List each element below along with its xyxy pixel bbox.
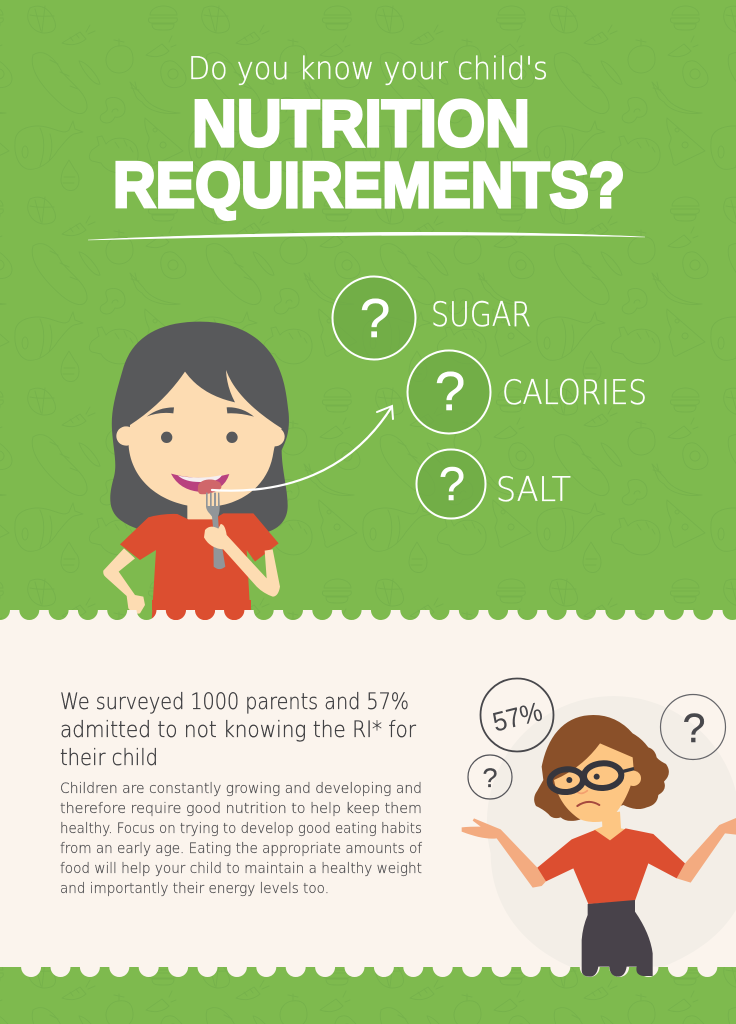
skirt (582, 900, 653, 977)
question circle: salt: ? (439, 457, 465, 510)
hair (534, 715, 669, 821)
title underline (88, 232, 645, 240)
fork (206, 493, 225, 569)
left arm (103, 548, 145, 614)
bubble: 57%: 57% (490, 696, 545, 738)
title: REQUIREMENTS? (113, 149, 625, 221)
face (116, 370, 285, 507)
title: NUTRITION (192, 86, 530, 160)
eyes (161, 432, 238, 443)
question circle: calories: ? (435, 360, 465, 422)
question circle: salt: SALT (496, 470, 571, 510)
survey body: Children are constantly growing and developing and (60, 781, 422, 797)
cream section (0, 610, 736, 977)
eyebrows (147, 407, 254, 417)
survey heading (60, 690, 417, 771)
illustration: confused woman (462, 696, 736, 977)
illustration: girl eating (103, 322, 289, 620)
title (113, 51, 625, 221)
top (537, 828, 685, 904)
neck (187, 500, 214, 523)
neck (594, 812, 626, 841)
bubble: right question: ? (683, 705, 705, 751)
survey body (60, 781, 423, 897)
survey heading: admitted to not knowing the RI* for (60, 718, 417, 743)
shirt (120, 513, 279, 620)
survey body: food will help your child to maintain a healthy weight (60, 861, 422, 877)
backdrop circle (487, 696, 736, 967)
nose and mouth (576, 791, 599, 806)
arrow (212, 406, 393, 491)
survey body: from an early age. Eating the appropriate amounts of (60, 841, 423, 857)
survey body: therefore require good nutrition to help keep them (60, 801, 422, 817)
bubble: 57% (480, 678, 554, 752)
survey body: and importantly their energy levels too. (60, 881, 329, 897)
glasses (549, 762, 634, 793)
question circle: sugar (332, 276, 531, 360)
right arm (204, 524, 280, 597)
survey text (60, 690, 423, 897)
question circle: calories: CALORIES (502, 373, 647, 413)
bubble: small question: ? (482, 763, 498, 793)
bubble: right question (660, 694, 726, 760)
arms (462, 818, 736, 888)
bubble: small question (468, 755, 512, 799)
title: Do you know your child's (188, 51, 548, 87)
survey heading: their child (60, 746, 158, 771)
question circle: salt (416, 450, 571, 518)
question circle: sugar: SUGAR (431, 295, 531, 335)
food on fork (198, 480, 221, 494)
girl's shirt scallops over the cream edge (152, 600, 251, 620)
face (554, 743, 641, 822)
mouth (171, 474, 229, 492)
question circle: calories (408, 350, 647, 434)
survey body: healthy. Focus on trying to develop good eating habits (60, 821, 422, 837)
question circle: sugar: ? (360, 287, 390, 349)
eyes (566, 774, 600, 783)
survey heading: We surveyed 1000 parents and 57% (60, 690, 409, 715)
